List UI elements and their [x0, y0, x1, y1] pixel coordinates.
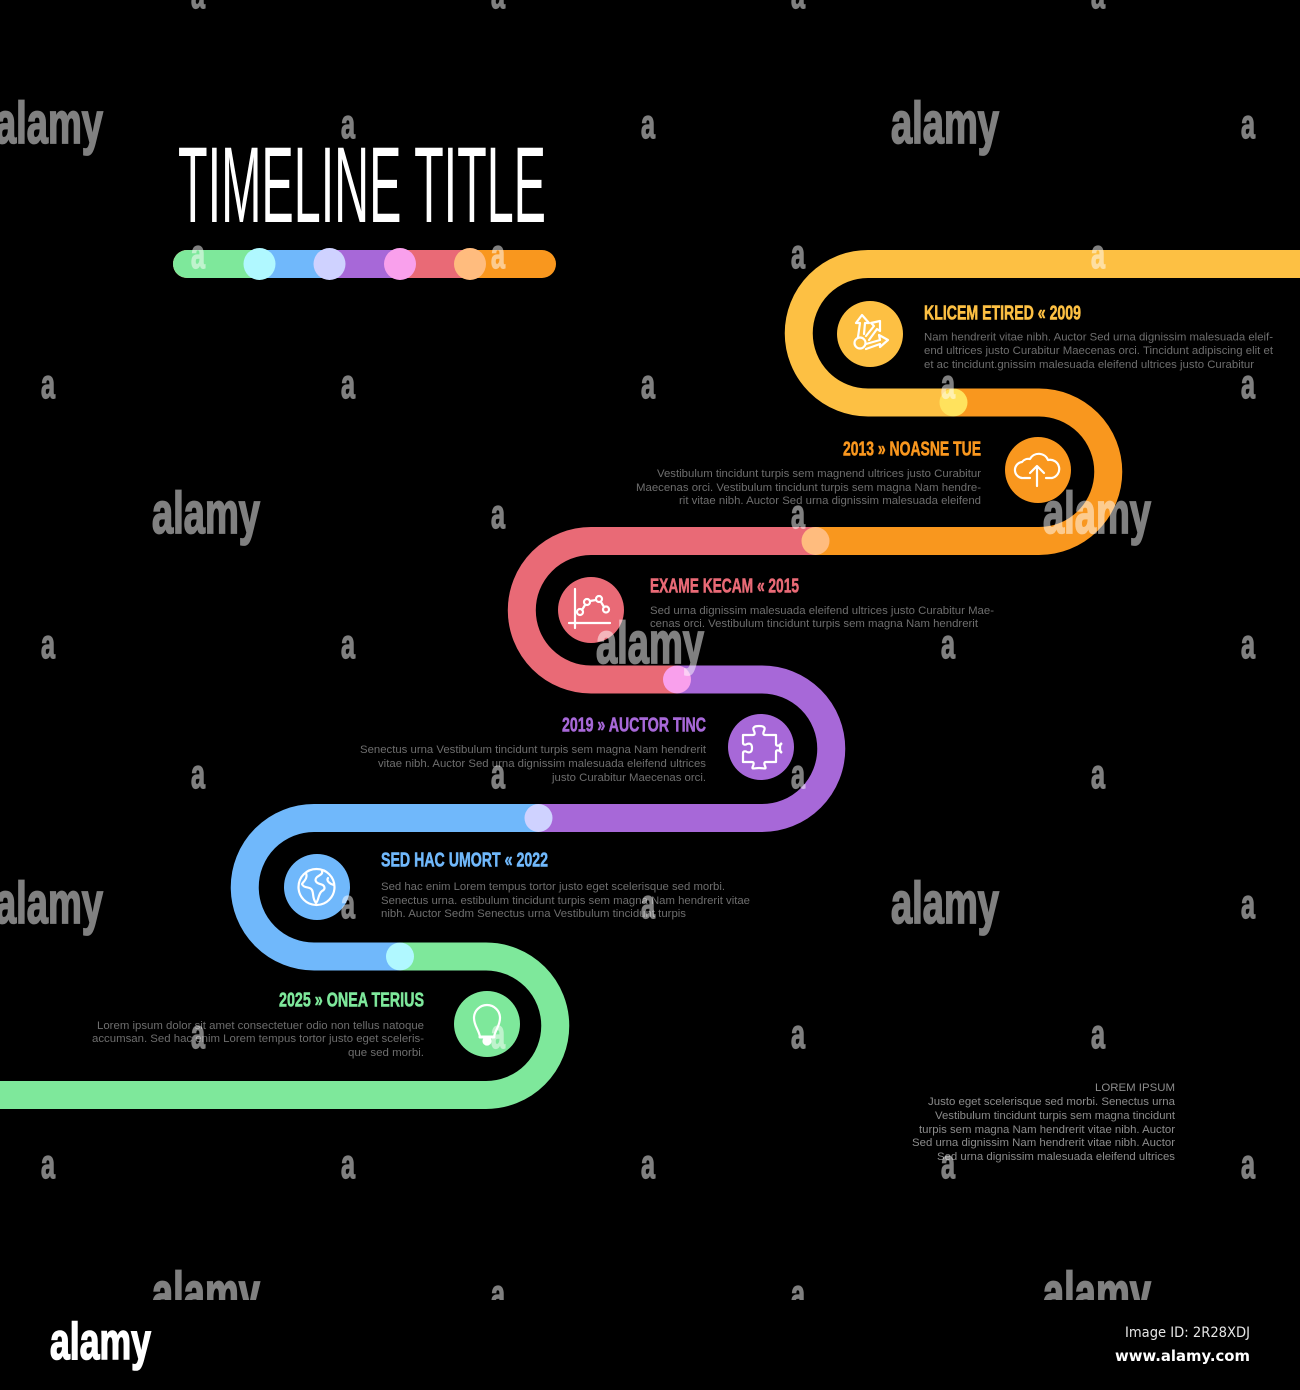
body text: Sed urna dignissim malesuada eleifend ultrices justo Curabitur Mae- [650, 605, 994, 617]
icon: line chart [558, 577, 624, 643]
body text: Nam hendrerit vitae nibh. Auctor Sed urna dignissim malesuada eleif- [924, 332, 1273, 344]
watermark pattern: a [1241, 621, 1256, 667]
watermark pattern: a [791, 491, 806, 537]
watermark pattern: alamy [596, 611, 704, 676]
body text: Senectus urna Vestibulum tincidunt turpis sem magna Nam hendrerit [360, 744, 707, 756]
milestone 2015 [558, 576, 994, 643]
footer strip [0, 1300, 1300, 1390]
watermark pattern: a [491, 491, 506, 537]
heading: KLICEM ETIRED « 2009 [924, 302, 1081, 324]
icon: puzzle piece [728, 714, 794, 780]
milestone 2022 [284, 850, 750, 920]
note text block: Sed urna dignissim Nam hendrerit vitae nibh. Auctor [912, 1137, 1175, 1149]
body text: rit vitae nibh. Auctor Sed urna dignissim malesuada eleifend [679, 495, 981, 507]
body text: Sed hac enim Lorem tempus tortor justo eget scelerisque sed morbi. [381, 881, 725, 893]
watermark pattern: a [791, 1011, 806, 1057]
watermark pattern: a [941, 1141, 956, 1187]
body text [381, 881, 750, 920]
watermark pattern: alamy [1043, 1261, 1151, 1326]
watermark pattern: a [341, 881, 356, 927]
body text: et ac tincidunt.gnissim malesuada eleifend ultrices justo Curabitur [924, 359, 1254, 371]
watermark pattern: a [941, 621, 956, 667]
watermark pattern: a [791, 1271, 806, 1317]
watermark pattern: a [491, 1011, 506, 1057]
body text [650, 605, 994, 630]
watermark pattern: a [491, 231, 506, 277]
watermark pattern: a [1091, 231, 1106, 277]
watermark pattern: a [1091, 751, 1106, 797]
watermark pattern: a [641, 101, 656, 147]
body text: que sed morbi. [348, 1047, 424, 1059]
watermark pattern: a [191, 1011, 206, 1057]
milestone 2013 [636, 437, 1071, 507]
heading: 2019 » AUCTOR TINC [562, 714, 706, 736]
note text block: Justo eget scelerisque sed morbi. Senectus urna [928, 1096, 1176, 1108]
body text [92, 1020, 424, 1059]
body text: justo Curabitur Maecenas orci. [551, 772, 706, 784]
watermark pattern: a [641, 1141, 656, 1187]
icon: globe [284, 854, 350, 920]
timeline joint dots [386, 388, 968, 970]
watermark pattern: a [641, 881, 656, 927]
body text [360, 744, 707, 784]
watermark pattern: alamy [891, 91, 999, 156]
body text: accumsan. Sed hac enim Lorem tempus tortor justo eget sceleris- [92, 1033, 424, 1045]
watermark pattern: a [491, 1271, 506, 1317]
watermark pattern: a [941, 361, 956, 407]
watermark pattern: a [641, 361, 656, 407]
heading: EXAME KECAM « 2015 [650, 576, 799, 598]
icon: cloud upload [1005, 437, 1071, 503]
body text: end ultrices justo Curabitur Maecenas orci. Tincidunt adipiscing elit et [924, 345, 1274, 357]
infographic canvas: TIMELINE TITLE [178, 124, 546, 245]
winding timeline road [0, 264, 1300, 1095]
watermark pattern: alamy [152, 1261, 260, 1326]
watermark pattern: a [341, 1141, 356, 1187]
watermark pattern: a [341, 101, 356, 147]
watermark pattern: alamy [1043, 481, 1151, 546]
watermark pattern: alamy [152, 481, 260, 546]
website: www.alamy.com [1115, 1347, 1250, 1365]
milestone 2009 [837, 301, 1274, 371]
icon: branching arrows [837, 301, 903, 367]
body text: Senectus urna. estibulum tincidunt turpis sem magna Nam hendrerit vitae [381, 895, 750, 907]
body text [636, 468, 981, 507]
watermark pattern: a [41, 1141, 56, 1187]
watermark pattern: a [1091, 1011, 1106, 1057]
watermark pattern: a [1241, 1141, 1256, 1187]
icon: light bulb [454, 991, 520, 1057]
watermark pattern: a [341, 361, 356, 407]
watermark pattern: a [191, 751, 206, 797]
note text block [912, 1082, 1176, 1163]
watermark pattern: a [1241, 881, 1256, 927]
image id: Image ID: 2R28XDJ [1125, 1325, 1250, 1341]
note text block: Vestibulum tincidunt turpis sem magna tincidunt [935, 1110, 1176, 1122]
watermark pattern: a [491, 751, 506, 797]
milestone 2019 [360, 714, 794, 784]
title colour bar [173, 248, 556, 280]
body text: vitae nibh. Auctor Sed urna dignissim malesuada eleifend ultrices [378, 758, 706, 770]
note text block: LOREM IPSUM [1095, 1082, 1175, 1094]
footer logo: alamy [50, 1313, 151, 1371]
watermark pattern: a [41, 621, 56, 667]
heading: 2025 » ONEA TERIUS [279, 990, 424, 1012]
watermark pattern: a [191, 231, 206, 277]
watermark pattern: a [41, 361, 56, 407]
body text [924, 332, 1274, 371]
watermark pattern: a [791, 231, 806, 277]
body text: cenas orci. Vestibulum tincidunt turpis sem magna Nam hendrerit [650, 618, 979, 630]
note text block: turpis sem magna Nam hendrerit vitae nibh. Auctor [919, 1124, 1175, 1136]
body text: Vestibulum tincidunt turpis sem magnend ultrices justo Curabitur [657, 468, 981, 480]
watermark pattern: a [1241, 361, 1256, 407]
watermark pattern: alamy [891, 871, 999, 936]
body text: Maecenas orci. Vestibulum tincidunt turpis sem magna Nam hendre- [636, 482, 981, 494]
body text: Lorem ipsum dolor sit amet consectetuer odio non tellus natoque [97, 1020, 424, 1032]
watermark pattern: a [341, 621, 356, 667]
heading: SED HAC UMORT « 2022 [381, 850, 548, 872]
watermark pattern: a [1241, 101, 1256, 147]
note text block: Sed urna dignissim malesuada eleifend ultrices [937, 1151, 1175, 1163]
watermark pattern: a [791, 751, 806, 797]
body text: nibh. Auctor Sedm Senectus urna Vestibulum tincidunt turpis [381, 908, 686, 920]
milestone 2025 [92, 990, 520, 1059]
heading: 2013 » NOASNE TUE [843, 438, 981, 460]
